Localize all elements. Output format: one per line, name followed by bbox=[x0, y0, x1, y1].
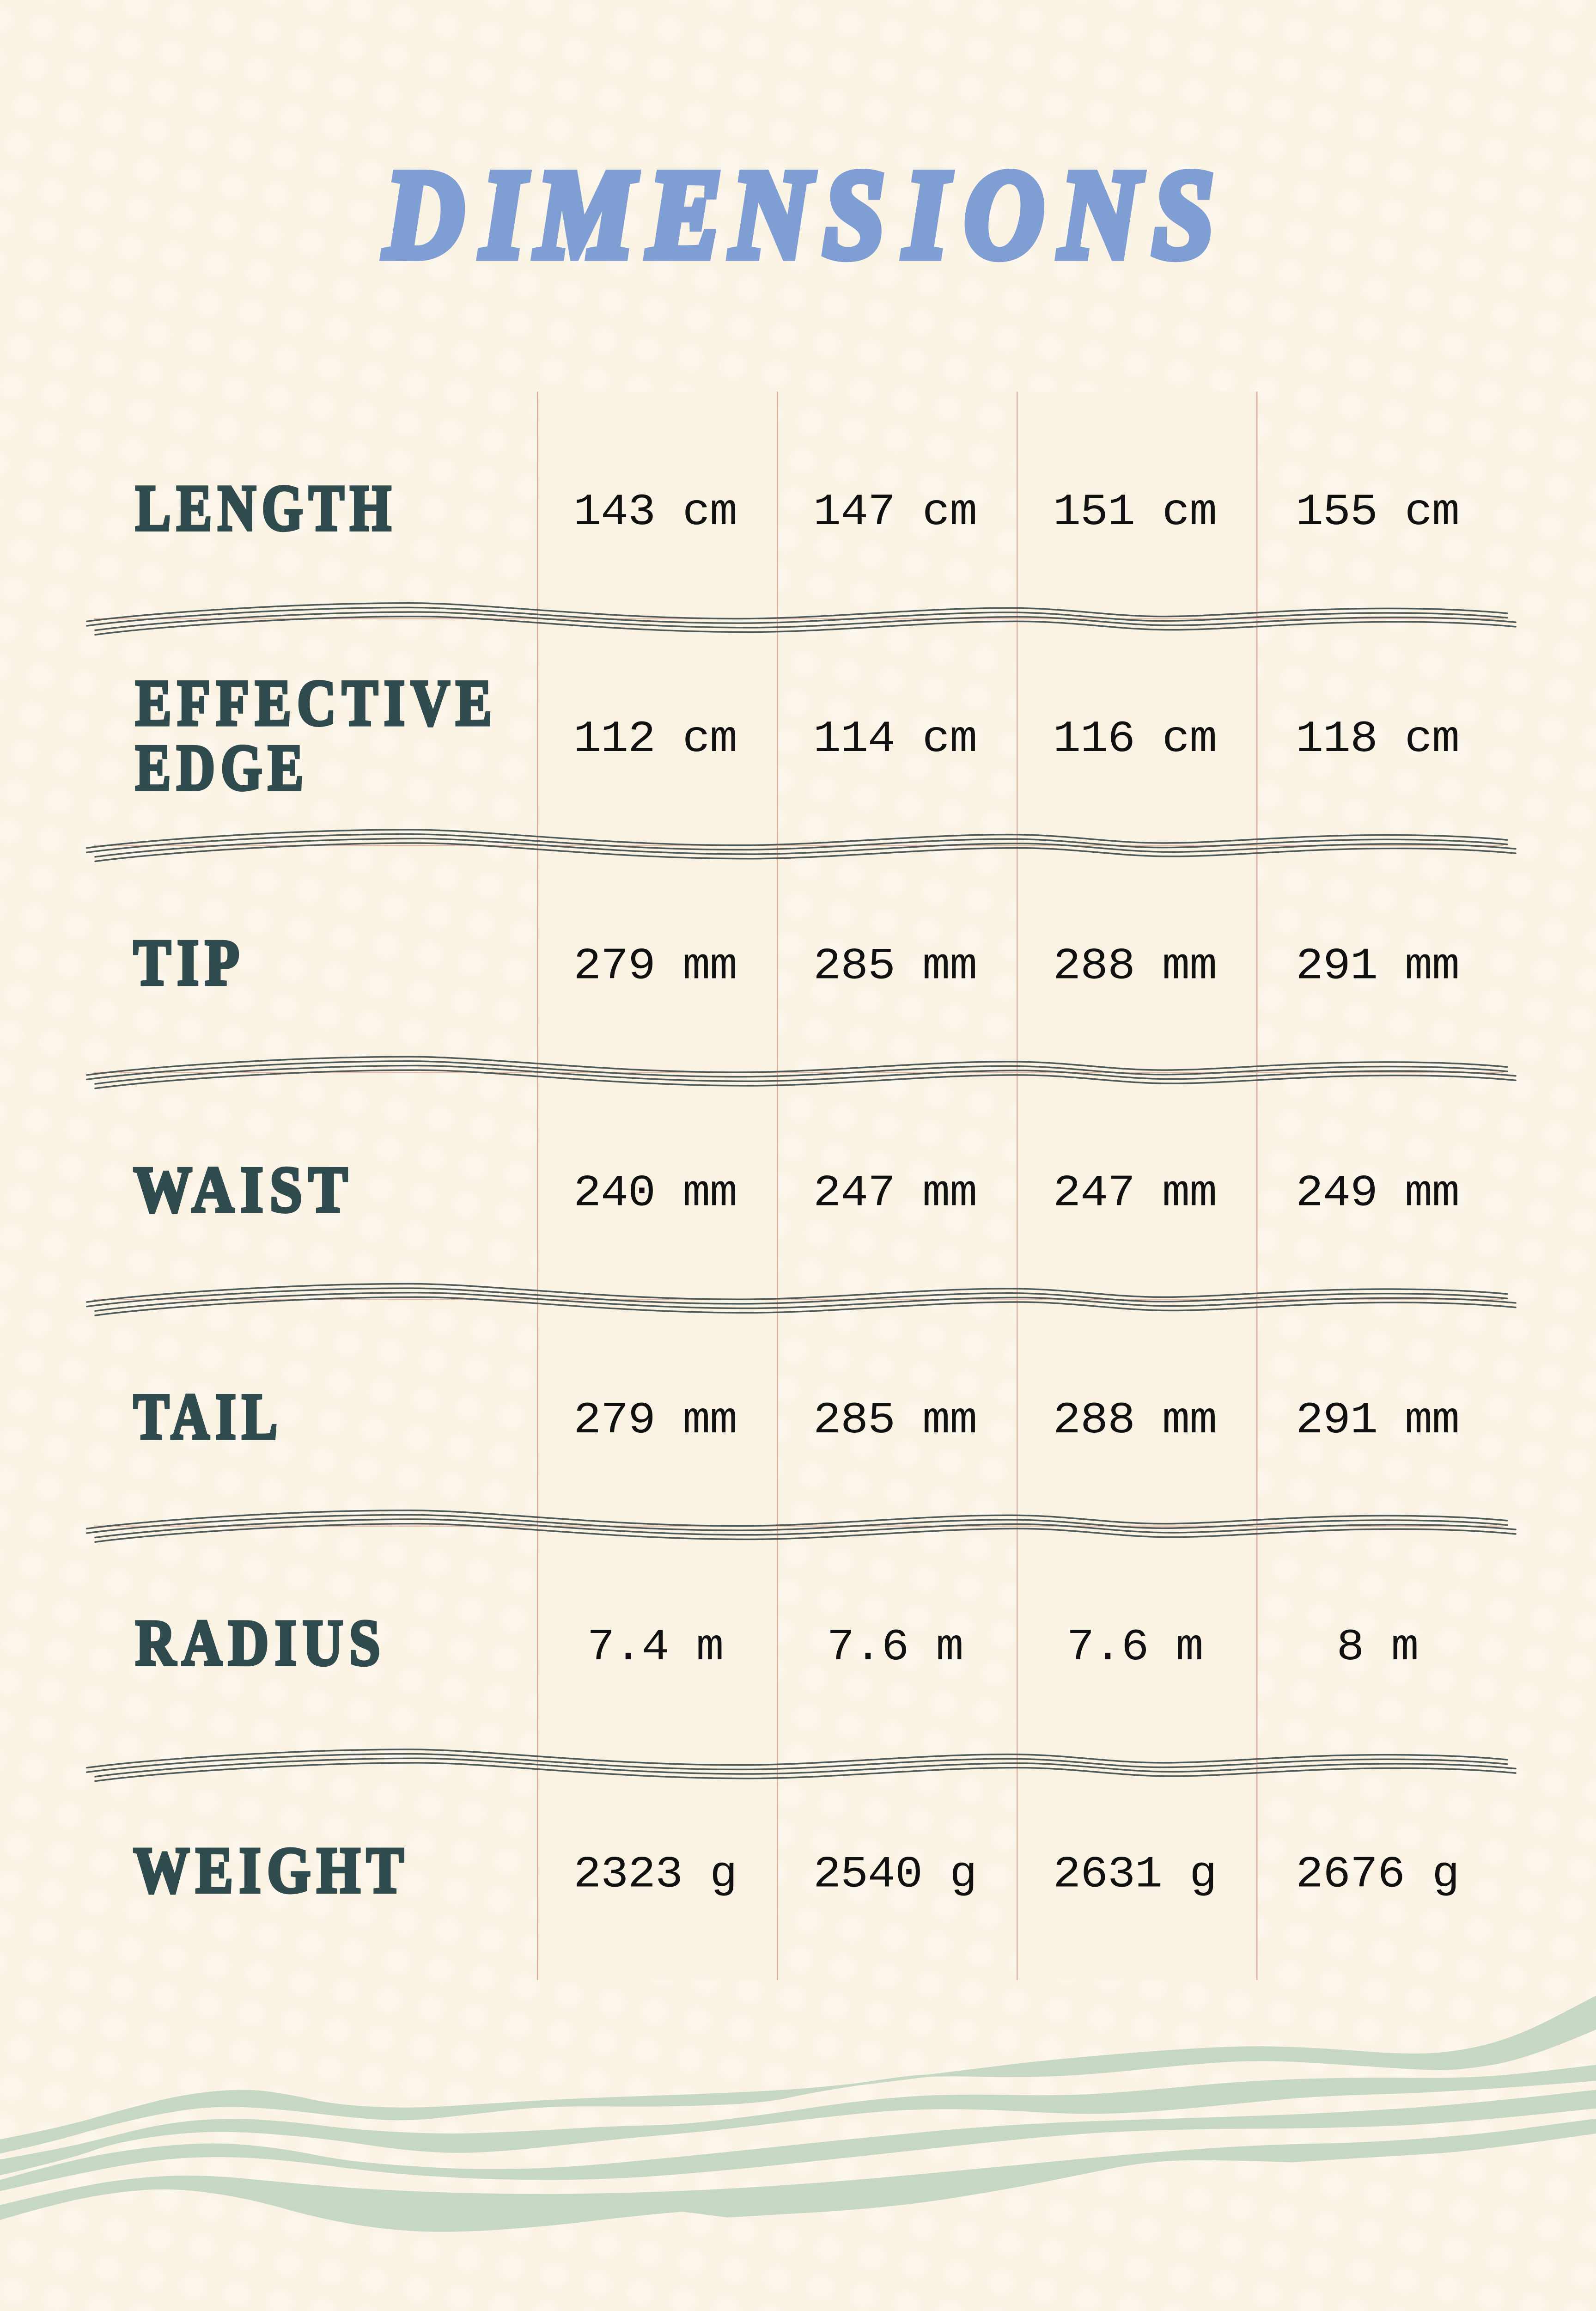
label: length: LENGTH bbox=[135, 472, 397, 544]
values: tip: 279 mm bbox=[573, 941, 737, 992]
label: effective edge: EFFECTIVE bbox=[135, 667, 498, 740]
row: length bbox=[135, 472, 1459, 544]
values: weight: 2631 g bbox=[1053, 1849, 1217, 1900]
values: effective edge: 114 cm bbox=[813, 714, 977, 765]
row: effective edge bbox=[135, 667, 1459, 804]
values: weight: 2323 g bbox=[573, 1849, 737, 1900]
values: tip: 288 mm bbox=[1053, 941, 1217, 992]
panel: table column fills bbox=[537, 391, 1257, 1980]
values: waist bbox=[573, 1168, 1459, 1219]
values: tip: 285 mm bbox=[813, 941, 977, 992]
values: length: 155 cm bbox=[1296, 487, 1459, 538]
values: radius: 7.6 m bbox=[1067, 1622, 1203, 1673]
values: tail: 291 mm bbox=[1296, 1395, 1459, 1446]
values: radius: 7.4 m bbox=[587, 1622, 723, 1673]
wavy divider 3 bbox=[87, 1057, 1516, 1088]
values: waist: 247 mm bbox=[1053, 1168, 1217, 1219]
values: effective edge: 116 cm bbox=[1053, 714, 1217, 765]
values: tail: 285 mm bbox=[813, 1395, 977, 1446]
values: effective edge: 112 cm bbox=[573, 714, 737, 765]
values: waist: 249 mm bbox=[1296, 1168, 1459, 1219]
values: radius: 7.6 m bbox=[827, 1622, 963, 1673]
values: length: 143 cm bbox=[573, 487, 737, 538]
values: waist: 247 mm bbox=[813, 1168, 977, 1219]
wavy divider 6 bbox=[87, 1749, 1516, 1781]
values: tail: 288 mm bbox=[1053, 1395, 1217, 1446]
wavy divider 4 bbox=[87, 1284, 1516, 1315]
values: weight: 2540 g bbox=[813, 1849, 977, 1900]
values: tail bbox=[573, 1395, 1459, 1446]
label: tip: TIP bbox=[134, 926, 245, 999]
wavy divider 2 bbox=[87, 830, 1516, 862]
values: radius bbox=[587, 1622, 1419, 1673]
values: length bbox=[573, 487, 1459, 538]
row: tip bbox=[134, 926, 1459, 999]
values: tip bbox=[573, 941, 1459, 992]
values: weight bbox=[573, 1849, 1459, 1900]
label: radius: RADIUS bbox=[135, 1607, 386, 1679]
label: tail: TAIL bbox=[134, 1381, 283, 1453]
values: length: 147 cm bbox=[813, 487, 977, 538]
values: effective edge: 118 cm bbox=[1296, 714, 1459, 765]
values: weight: 2676 g bbox=[1296, 1849, 1459, 1900]
values: effective edge bbox=[573, 714, 1459, 765]
label: weight: WEIGHT bbox=[134, 1834, 410, 1907]
label: effective edge: EDGE bbox=[135, 731, 309, 804]
row: waist bbox=[134, 1153, 1459, 1226]
values: waist: 240 mm bbox=[573, 1168, 737, 1219]
green wave bands bbox=[0, 1997, 1596, 2231]
row: weight bbox=[134, 1834, 1459, 1907]
table column rules bbox=[537, 391, 1258, 1980]
row: tail bbox=[134, 1381, 1459, 1453]
title: DIMENSIONS bbox=[384, 145, 1214, 284]
values: tail: 279 mm bbox=[573, 1395, 737, 1446]
values: radius: 8 m bbox=[1336, 1622, 1419, 1673]
row: radius bbox=[135, 1607, 1419, 1679]
wavy divider 1 bbox=[87, 603, 1516, 635]
values: length: 151 cm bbox=[1053, 487, 1217, 538]
values: tip: 291 mm bbox=[1296, 941, 1459, 992]
wavy divider 5 bbox=[87, 1510, 1516, 1542]
label: waist: WAIST bbox=[134, 1153, 354, 1226]
label: effective edge bbox=[135, 667, 498, 804]
